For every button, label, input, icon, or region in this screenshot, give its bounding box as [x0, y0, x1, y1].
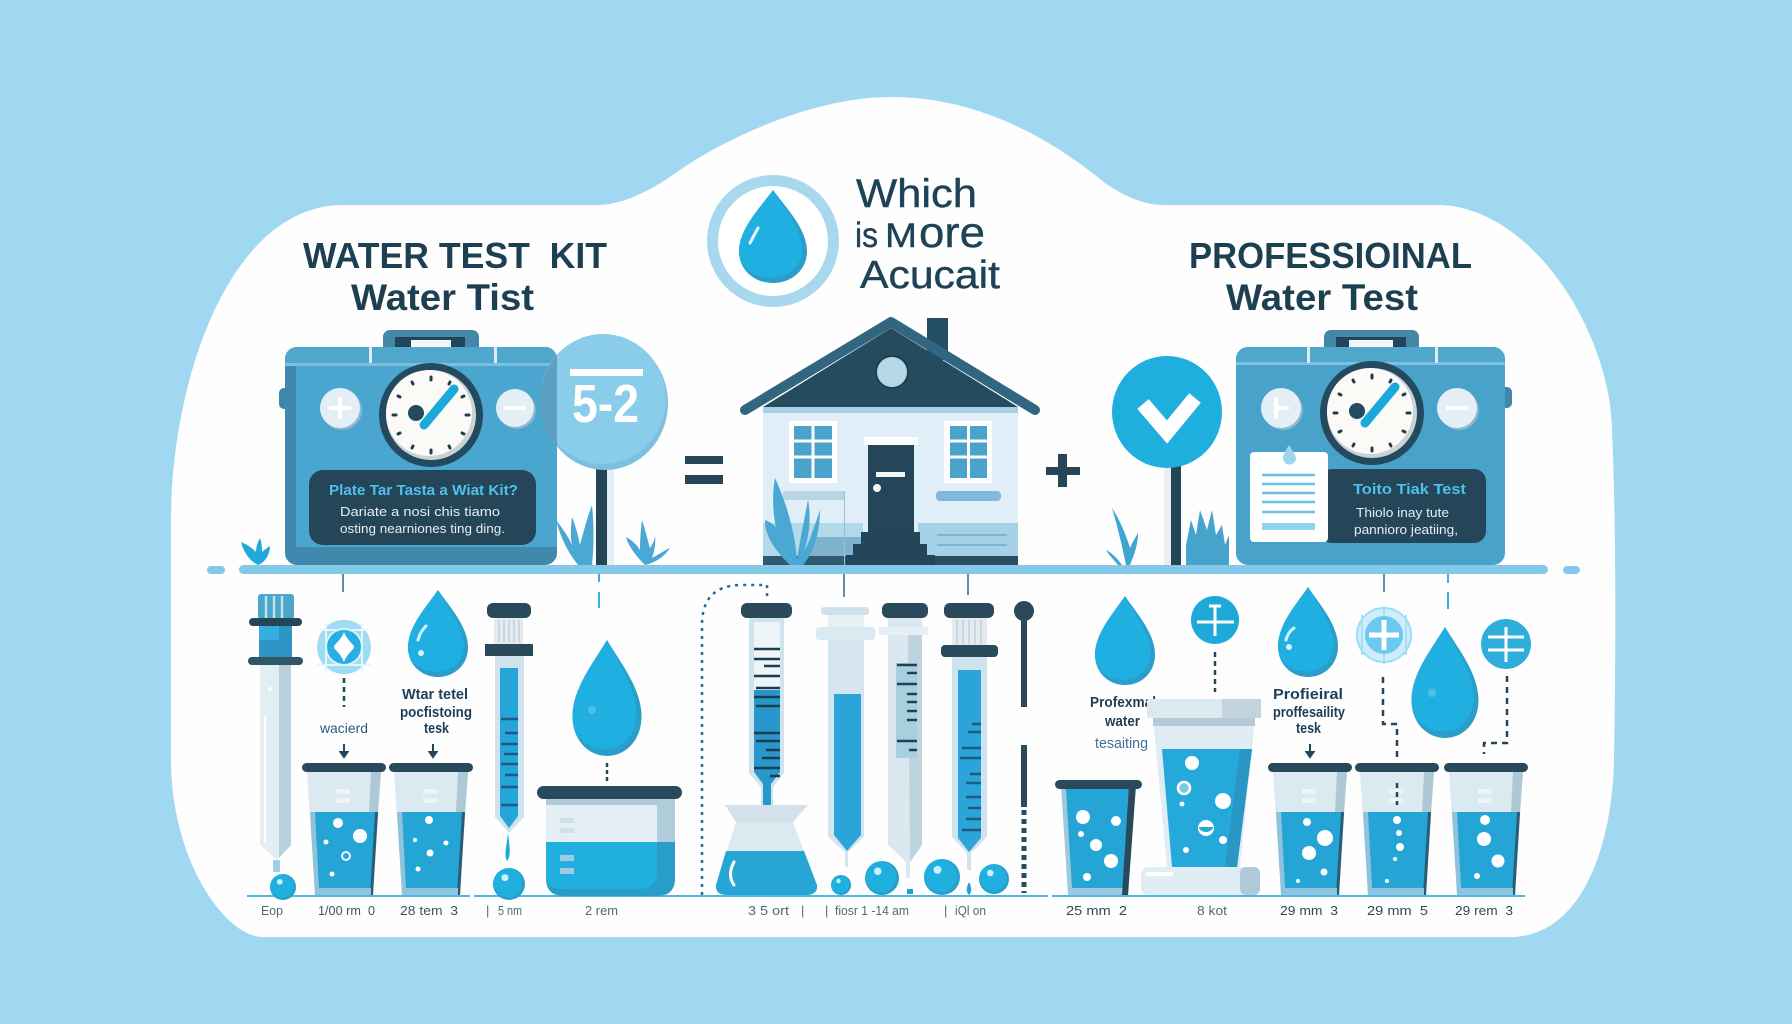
bottom scale labels: 25 mm 2	[1066, 903, 1127, 918]
kit info label: Toito Tiak Test	[1353, 481, 1466, 498]
heading: professional water test	[1189, 235, 1472, 318]
icon: plus circle I	[1191, 596, 1239, 644]
icon: plus circle Q	[1481, 619, 1531, 669]
clock gauge	[1320, 361, 1424, 465]
bottom scale labels: |	[825, 903, 828, 918]
bottom scale labels: |	[801, 903, 804, 918]
sign: 5-2 score	[540, 334, 668, 565]
bottom scale labels: |	[486, 903, 489, 918]
drop big	[572, 640, 642, 756]
heading: professional water test: PROFESSIOINAL	[1189, 235, 1472, 276]
minus button	[1437, 388, 1479, 430]
right professional kit case	[1236, 330, 1512, 565]
bottom scale labels: 29 mm 3	[1280, 903, 1338, 918]
plant: behind left sign	[556, 505, 594, 565]
roof	[745, 322, 1035, 410]
beaker 1	[302, 763, 386, 895]
center title: which is more accurate	[855, 172, 1000, 297]
plus sign	[1046, 454, 1080, 487]
beaker 2	[389, 763, 473, 895]
kit info label: Thiolo inay tute	[1356, 506, 1449, 520]
door	[864, 437, 918, 533]
heading: water test kit: WATER TEST KIT	[303, 235, 607, 276]
drop H	[1095, 596, 1155, 685]
plus button	[320, 388, 362, 430]
dashed connector	[1383, 677, 1397, 757]
label: professional quality test	[1273, 687, 1345, 737]
left water test kit case	[279, 330, 557, 565]
kit side knob	[279, 388, 291, 409]
dashed connector	[343, 678, 345, 707]
kit info label: Plate Tar Tasta a Wiat Kit?	[329, 482, 518, 499]
kit info label: osting nearniones ting ding.	[340, 522, 505, 536]
connector lines from shelf	[343, 574, 1448, 609]
drop P	[1412, 627, 1478, 738]
bottom scale labels: 1/00 rm 0	[318, 903, 375, 918]
chimney	[927, 318, 948, 360]
label: professional water testing: tesaiting	[1095, 736, 1148, 752]
kit body	[285, 347, 557, 565]
label: water test processing: tesk	[424, 721, 450, 737]
heading: water test kit	[303, 235, 607, 318]
beaker M	[1355, 763, 1439, 895]
clipboard	[1250, 445, 1328, 542]
label: professional water testing: water	[1104, 714, 1140, 730]
white blob panel	[171, 97, 1615, 937]
steps	[846, 532, 935, 565]
test tube B	[485, 603, 533, 900]
plant: left of check sign	[1106, 508, 1138, 565]
kit info label: pannioro jeatiing,	[1354, 523, 1458, 537]
pin marker	[1014, 601, 1034, 893]
heading: water test kit: Water Tist	[351, 277, 534, 318]
bottom scale labels: 5 nm	[498, 903, 522, 918]
left dropper	[248, 594, 303, 900]
clock gauge	[379, 363, 483, 467]
bottom scale labels: 28 tem 3	[400, 903, 458, 918]
label: professional quality test: tesk	[1296, 721, 1322, 737]
dashed connector	[1484, 676, 1507, 754]
center title: which is more accurate: ore	[919, 209, 985, 257]
icon: plus molecule O	[1357, 606, 1411, 664]
beaker L	[1268, 763, 1352, 895]
label: professional quality test: proffesaility	[1273, 705, 1345, 721]
center title: which is more accurate: is	[855, 216, 878, 255]
label: professional water testing: Profexmal	[1090, 695, 1156, 711]
drop A	[408, 590, 468, 677]
bottom scale labels: 29 mm 5	[1367, 903, 1428, 918]
kit handle	[1324, 330, 1419, 356]
bottom scale labels: Eop	[261, 903, 283, 918]
center title: which is more accurate: M	[885, 217, 917, 255]
bottom scale labels: |	[944, 903, 947, 918]
wide beaker	[537, 786, 682, 896]
bubbles at tube tips	[831, 859, 1009, 895]
center title: which is more accurate: Acucait	[860, 254, 1000, 297]
window boxes	[783, 491, 1001, 574]
plant: right of check sign	[1186, 510, 1229, 565]
kit info label	[1320, 469, 1486, 543]
bottom scale labels: iQl on	[955, 903, 986, 918]
kit side knob	[1499, 387, 1512, 408]
arrow	[430, 744, 436, 757]
bottom scale labels: 29 rem 3	[1455, 903, 1513, 918]
label: professional water testing	[1090, 695, 1156, 752]
kit info label: Dariate a nosi chis tiamo	[340, 505, 500, 519]
shelf line	[207, 565, 1580, 574]
arrow	[340, 744, 348, 757]
large cup J	[1141, 699, 1261, 895]
icon: central water drop in ring	[712, 180, 834, 302]
plant: small left	[241, 538, 270, 565]
kit handle	[383, 330, 479, 356]
test tube D	[816, 607, 875, 867]
sign: check mark	[1112, 356, 1222, 565]
arrow	[1306, 744, 1314, 757]
label: professional quality test: Profieiral	[1273, 687, 1343, 703]
test tube E	[879, 603, 928, 894]
syringe C	[741, 603, 792, 805]
bottom scale labels: 2 rem	[585, 903, 618, 918]
plant at house	[765, 478, 820, 565]
icon: water molecule	[317, 620, 371, 674]
house	[745, 318, 1035, 574]
center title: which is more accurate: Which	[856, 172, 977, 216]
house wall	[763, 407, 1018, 565]
equals sign	[685, 456, 723, 484]
bottom scale labels: 8 kot	[1197, 903, 1227, 918]
beaker N	[1444, 763, 1528, 895]
kit body	[1236, 347, 1505, 565]
dashed connector	[606, 763, 608, 783]
label: water test processing	[400, 687, 472, 737]
minus button	[496, 389, 536, 429]
sign: 5-2 score: 5-2	[572, 374, 639, 434]
cup H	[1055, 780, 1142, 895]
label: water test processing: Wtar tetel	[402, 687, 468, 703]
label: wacierd: wacierd	[319, 720, 368, 736]
bottom scale labels: fiosr 1 -14 am	[835, 903, 909, 918]
ground line	[247, 895, 1525, 897]
left window	[789, 421, 837, 483]
dashed curved connector	[702, 585, 767, 895]
plus button	[1261, 388, 1303, 430]
kit info label	[309, 470, 536, 545]
dashed connector	[1214, 652, 1216, 692]
flask	[716, 805, 817, 895]
right window	[944, 421, 992, 483]
test tube F	[941, 603, 998, 895]
bottom scale labels	[261, 903, 1513, 918]
bottom scale labels: 3 5 ort	[748, 903, 789, 918]
plant: right of left sign	[626, 520, 670, 565]
drop K	[1278, 587, 1338, 677]
label: water test processing: pocfistoing	[400, 705, 472, 721]
heading: professional water test: Water Test	[1226, 277, 1418, 318]
